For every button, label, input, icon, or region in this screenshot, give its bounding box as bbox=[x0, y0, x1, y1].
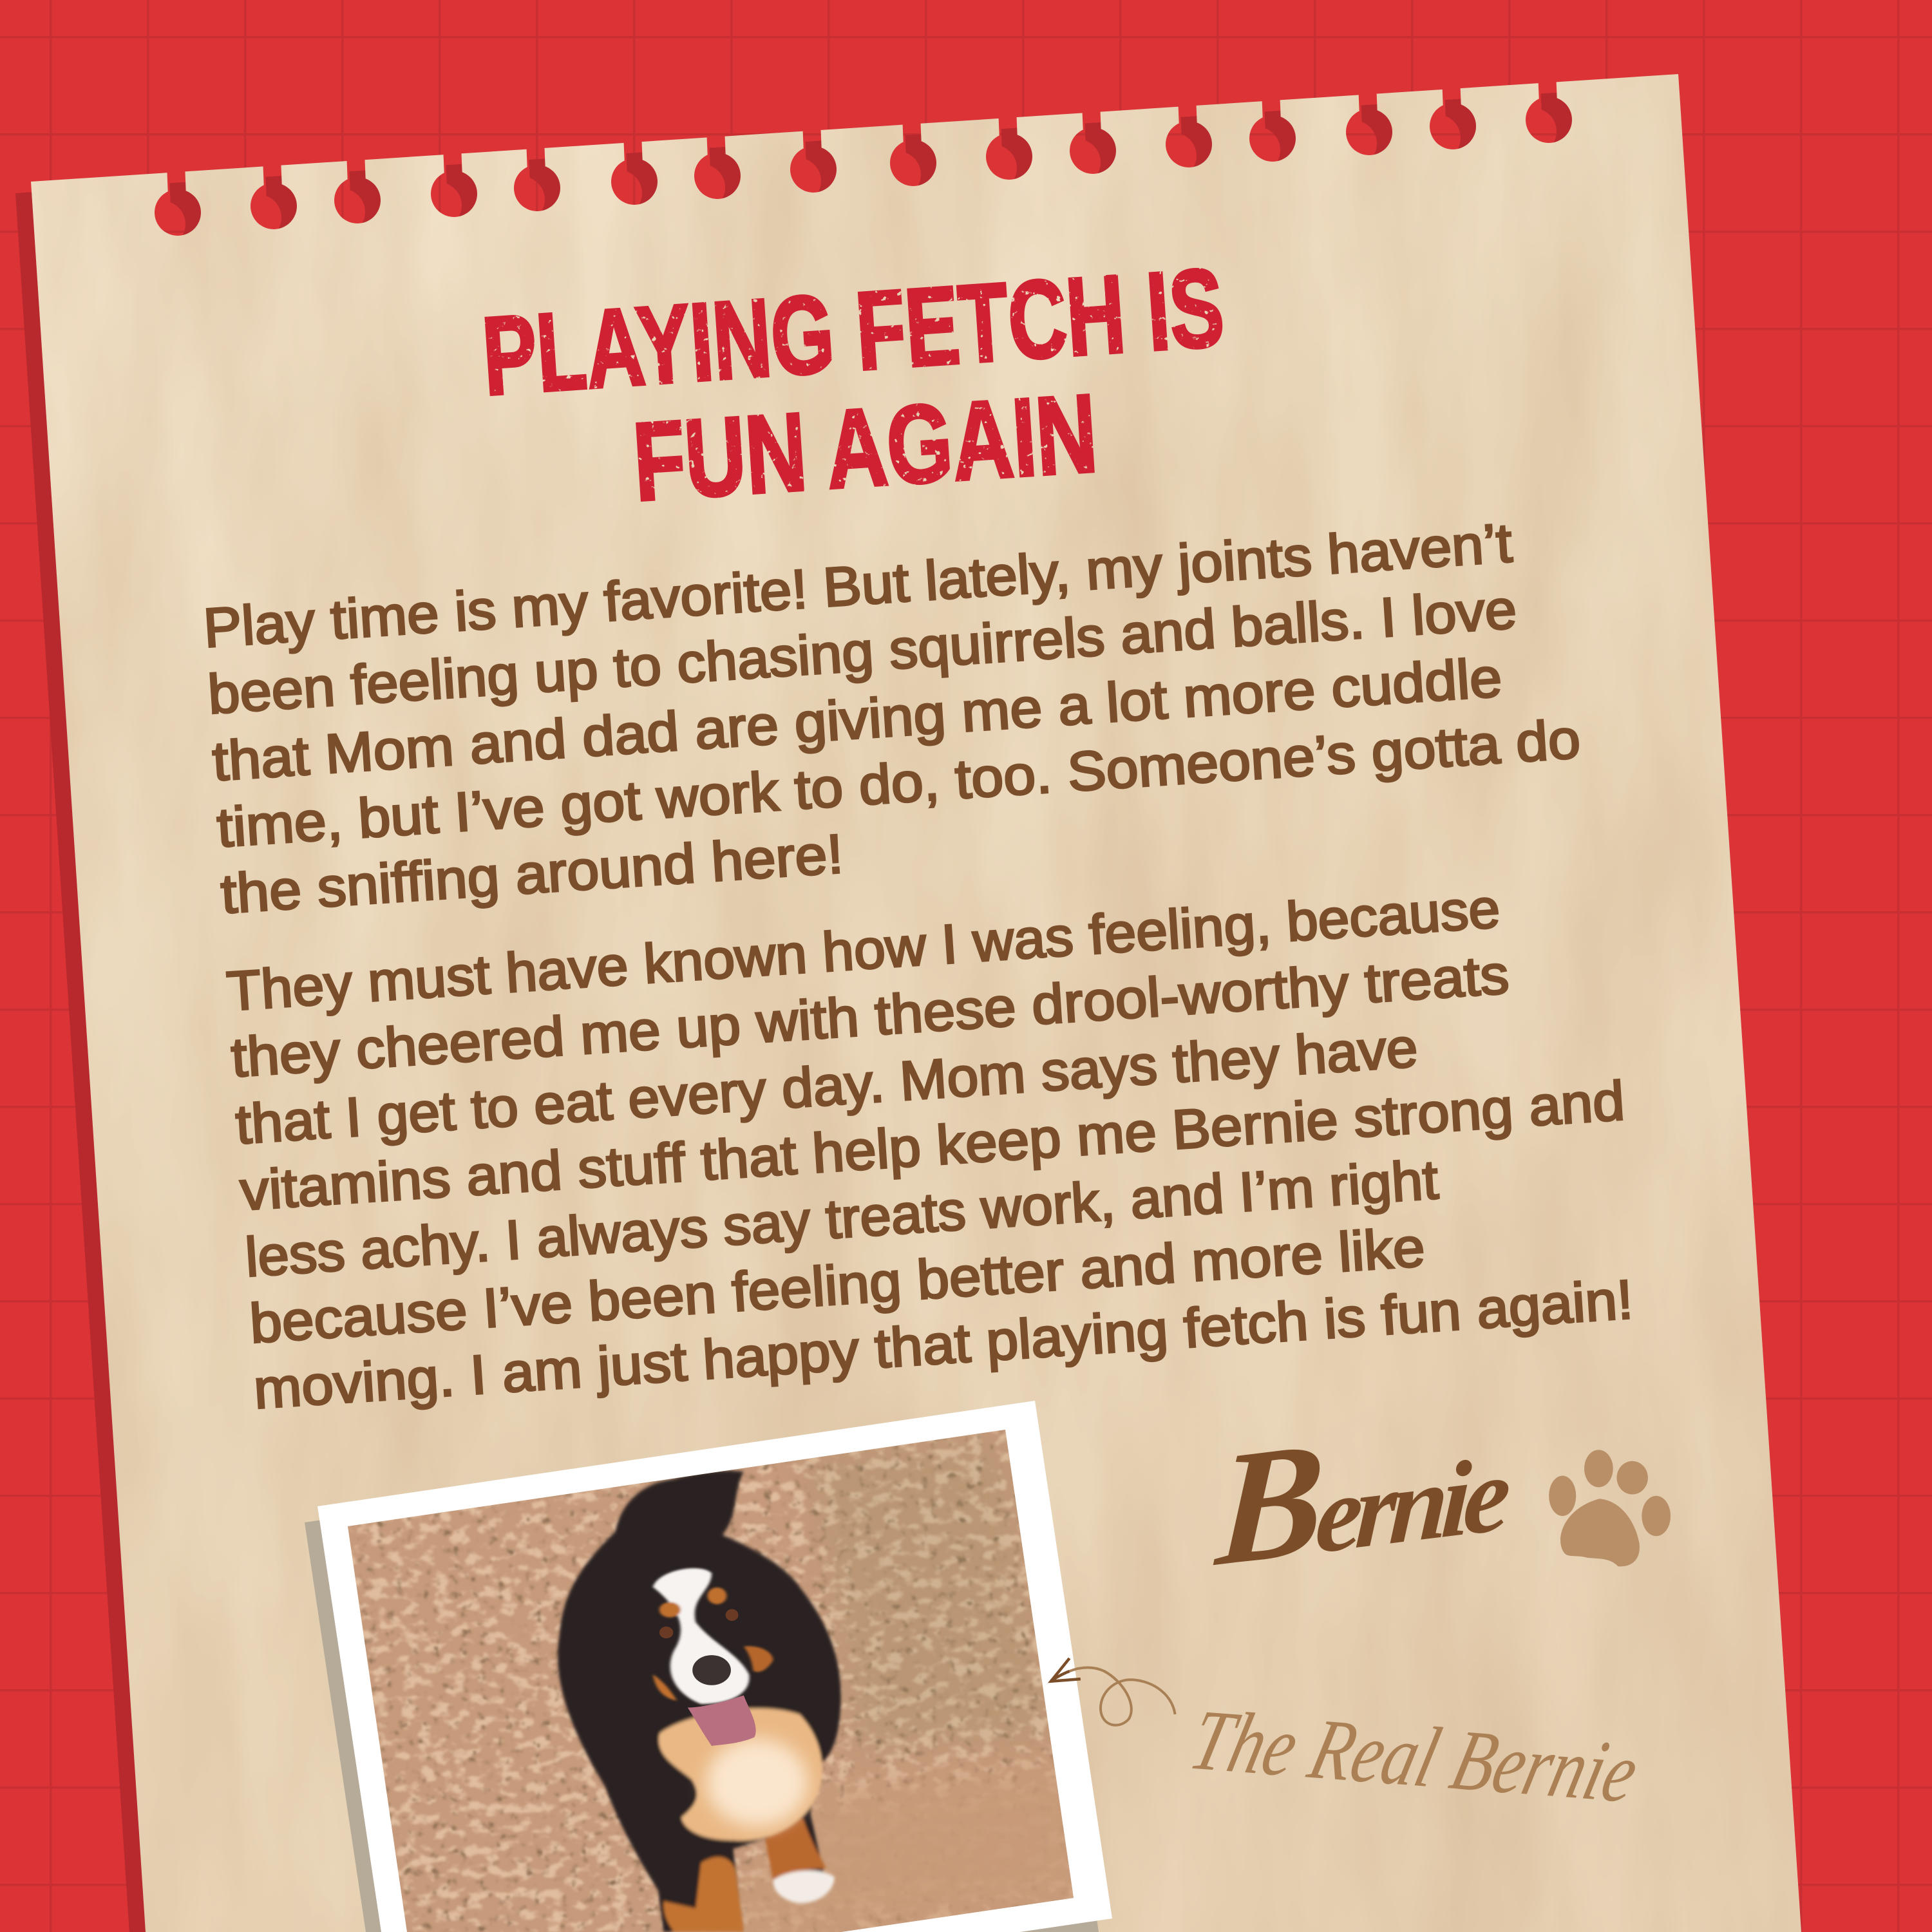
dog eyes and nose bbox=[659, 1609, 739, 1685]
text block: first paragraph: time, but I’ve got work to do, too. Someone’s gotta do bbox=[215, 708, 1582, 859]
text block: second paragraph: less achy. I always say treats work, and I’m right bbox=[243, 1149, 1440, 1289]
text block: second paragraph: they cheered me up with these drool-worthy treats bbox=[229, 943, 1511, 1089]
photo shadow bbox=[305, 1417, 1099, 1932]
caption: The Real Bernie: The Real Bernie bbox=[1181, 1692, 1647, 1821]
photo: Bernese mountain dog on leaves bbox=[348, 1430, 1074, 1932]
icon: paw print bbox=[1549, 1450, 1671, 1566]
text block: second paragraph: moving. I am just happy that playing fetch is fun again! bbox=[252, 1269, 1635, 1421]
dog chest highlight bbox=[706, 1739, 808, 1826]
text block: second paragraph: that I get to eat every day. Mom says they have bbox=[234, 1017, 1419, 1156]
arrow: pointing from caption to photo bbox=[1051, 1658, 1175, 1725]
dog body bbox=[558, 1470, 841, 1932]
title: PLAYING FETCH IS bbox=[479, 245, 1227, 419]
signature: Bernie: Bernie bbox=[1211, 1385, 1516, 1601]
dog face markings bbox=[653, 1568, 773, 1704]
dog tongue bbox=[688, 1695, 756, 1746]
text block: first paragraph: been feeling up to chasing squirrels and balls. I love bbox=[206, 578, 1519, 726]
title: FUN AGAIN bbox=[630, 371, 1101, 524]
title bbox=[479, 245, 1227, 524]
photo frame bbox=[317, 1401, 1112, 1932]
text block: first paragraph bbox=[202, 512, 1582, 925]
text block: second paragraph: vitamins and stuff that help keep me Bernie strong and bbox=[238, 1070, 1627, 1222]
text block: second paragraph: because I’ve been feeling better and more like bbox=[248, 1217, 1426, 1355]
paper drop shadow bbox=[15, 93, 1572, 1932]
text block: first paragraph: Play time is my favorite! But lately, my joints haven’t bbox=[202, 512, 1514, 659]
text block: second paragraph bbox=[225, 878, 1635, 1421]
text block: first paragraph: the sniffing around here! bbox=[219, 823, 845, 925]
text block: first paragraph: that Mom and dad are giving me a lot more cuddle bbox=[211, 647, 1504, 793]
text block: second paragraph: They must have known how I was feeling, because bbox=[225, 878, 1502, 1023]
